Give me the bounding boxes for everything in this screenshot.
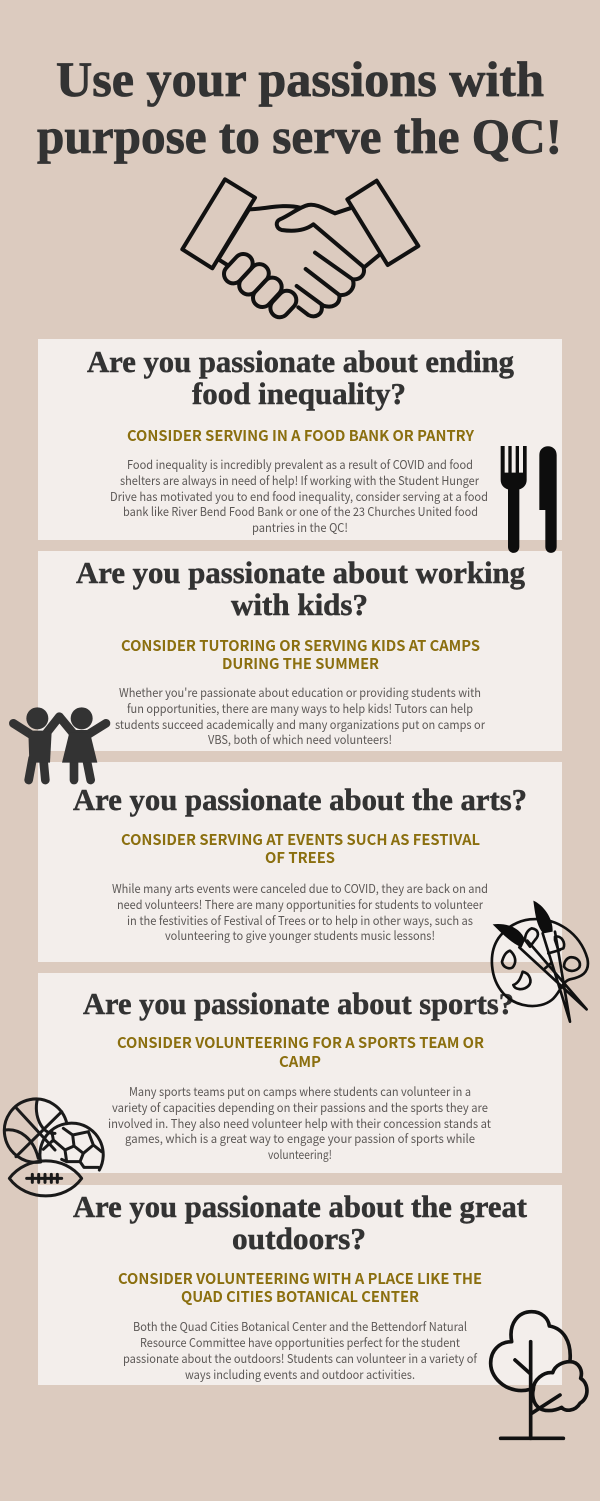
- icon: paint palette and brushes: [492, 901, 588, 1022]
- body text: need volunteers! There are many opportunities for students to volunteer: [117, 896, 483, 913]
- subheading: [118, 1268, 482, 1307]
- heading: Are you passionate about sports?: [83, 986, 514, 1021]
- body text: fun opportunities, there are many ways to help kids! Tutors can help: [127, 700, 473, 717]
- body text: passionate about the outdoors! Students can volunteer in a variety of: [123, 1350, 478, 1367]
- body text: Drive has motivated you to end food inequality, consider serving at a food: [110, 488, 488, 505]
- heading: outdoors?: [232, 1221, 366, 1256]
- subheading: QUAD CITIES BOTANICAL CENTER: [181, 1286, 419, 1307]
- body text: [123, 1318, 478, 1383]
- icon: handshake: [182, 179, 418, 321]
- body text: [112, 880, 488, 944]
- heading: [73, 1189, 528, 1256]
- subheading: [121, 635, 480, 674]
- body text: in the festivities of Festival of Trees or to help in other ways, such as: [127, 912, 473, 929]
- body text: ways including events and outdoor activities.: [185, 1366, 415, 1383]
- body text: While many arts events were canceled due to COVID, they are back on and: [112, 880, 488, 897]
- body text: Many sports teams put on camps where students can volunteer in a: [129, 1083, 471, 1100]
- heading: [76, 555, 525, 622]
- subheading: CAMP: [279, 1051, 321, 1072]
- body text: [110, 456, 488, 536]
- body text: volunteering to give younger students music lessons!: [165, 927, 435, 944]
- subheading: DURING THE SUMMER: [222, 653, 379, 674]
- title: [37, 51, 562, 164]
- subheading: CONSIDER VOLUNTEERING WITH A PLACE LIKE THE: [118, 1268, 482, 1289]
- body text: shelters are always in need of help! If working with the Student Hunger: [120, 472, 479, 489]
- body text: involved in. They also need volunteer help with their concession stands at: [108, 1115, 491, 1132]
- title: purpose to serve the QC!: [37, 108, 562, 164]
- body text: VBS, both of which need volunteers!: [208, 731, 392, 748]
- heading: Are you passionate about the great: [73, 1189, 528, 1224]
- body text: [108, 1083, 491, 1163]
- heading: Are you passionate about the arts?: [73, 782, 527, 817]
- body text: students succeed academically and many organizations put on camps or: [115, 716, 485, 733]
- heading: Are you passionate about working: [76, 555, 525, 590]
- panel background: [38, 762, 562, 962]
- body text: Whether you're passionate about education or providing students with: [119, 684, 481, 701]
- subheading: CONSIDER SERVING AT EVENTS SUCH AS FESTIVAL: [121, 829, 480, 850]
- heading: [87, 344, 514, 411]
- title: Use your passions with: [56, 51, 544, 107]
- panel: food inequality: [38, 339, 562, 540]
- heading: with kids?: [231, 587, 368, 622]
- panel background: [38, 339, 562, 540]
- body text: volunteering!: [268, 1146, 332, 1163]
- icon: two children: [13, 707, 106, 780]
- panel background: [38, 973, 562, 1173]
- subheading: CONSIDER VOLUNTEERING FOR A SPORTS TEAM OR: [117, 1032, 484, 1053]
- panel: outdoors: [38, 1185, 562, 1385]
- subheading: CONSIDER TUTORING OR SERVING KIDS AT CAMPS: [121, 635, 480, 656]
- panel: sports: [38, 973, 562, 1173]
- subheading: CONSIDER SERVING IN A FOOD BANK OR PANTRY: [127, 425, 474, 446]
- body text: pantries in the QC!: [252, 519, 348, 536]
- panel background: [38, 1185, 562, 1385]
- body text: variety of capacities depending on their passions and the sports they are: [112, 1099, 488, 1116]
- heading: food inequality?: [192, 376, 406, 411]
- body text: bank like River Bend Food Bank or one of the 23 Churches United food: [123, 503, 478, 520]
- body text: Both the Quad Cities Botanical Center and the Bettendorf Natural: [133, 1318, 467, 1335]
- heading: Are you passionate about ending: [87, 344, 514, 379]
- icon: trees: [491, 1312, 587, 1438]
- panel background: [38, 551, 562, 751]
- subheading: [121, 829, 480, 868]
- subheading: OF TREES: [265, 847, 335, 868]
- subheading: [117, 1032, 484, 1072]
- body text: Resource Committee have opportunities perfect for the student: [140, 1334, 460, 1351]
- body text: [115, 684, 485, 748]
- panel: arts: [38, 762, 562, 962]
- body text: games, which is a great way to engage your passion of sports while: [125, 1130, 475, 1147]
- icon: fork and knife: [501, 446, 557, 553]
- icon: sports balls: [4, 1099, 103, 1196]
- body text: Food inequality is incredibly prevalent as a result of COVID and food: [127, 456, 473, 473]
- panel: kids: [38, 551, 562, 751]
